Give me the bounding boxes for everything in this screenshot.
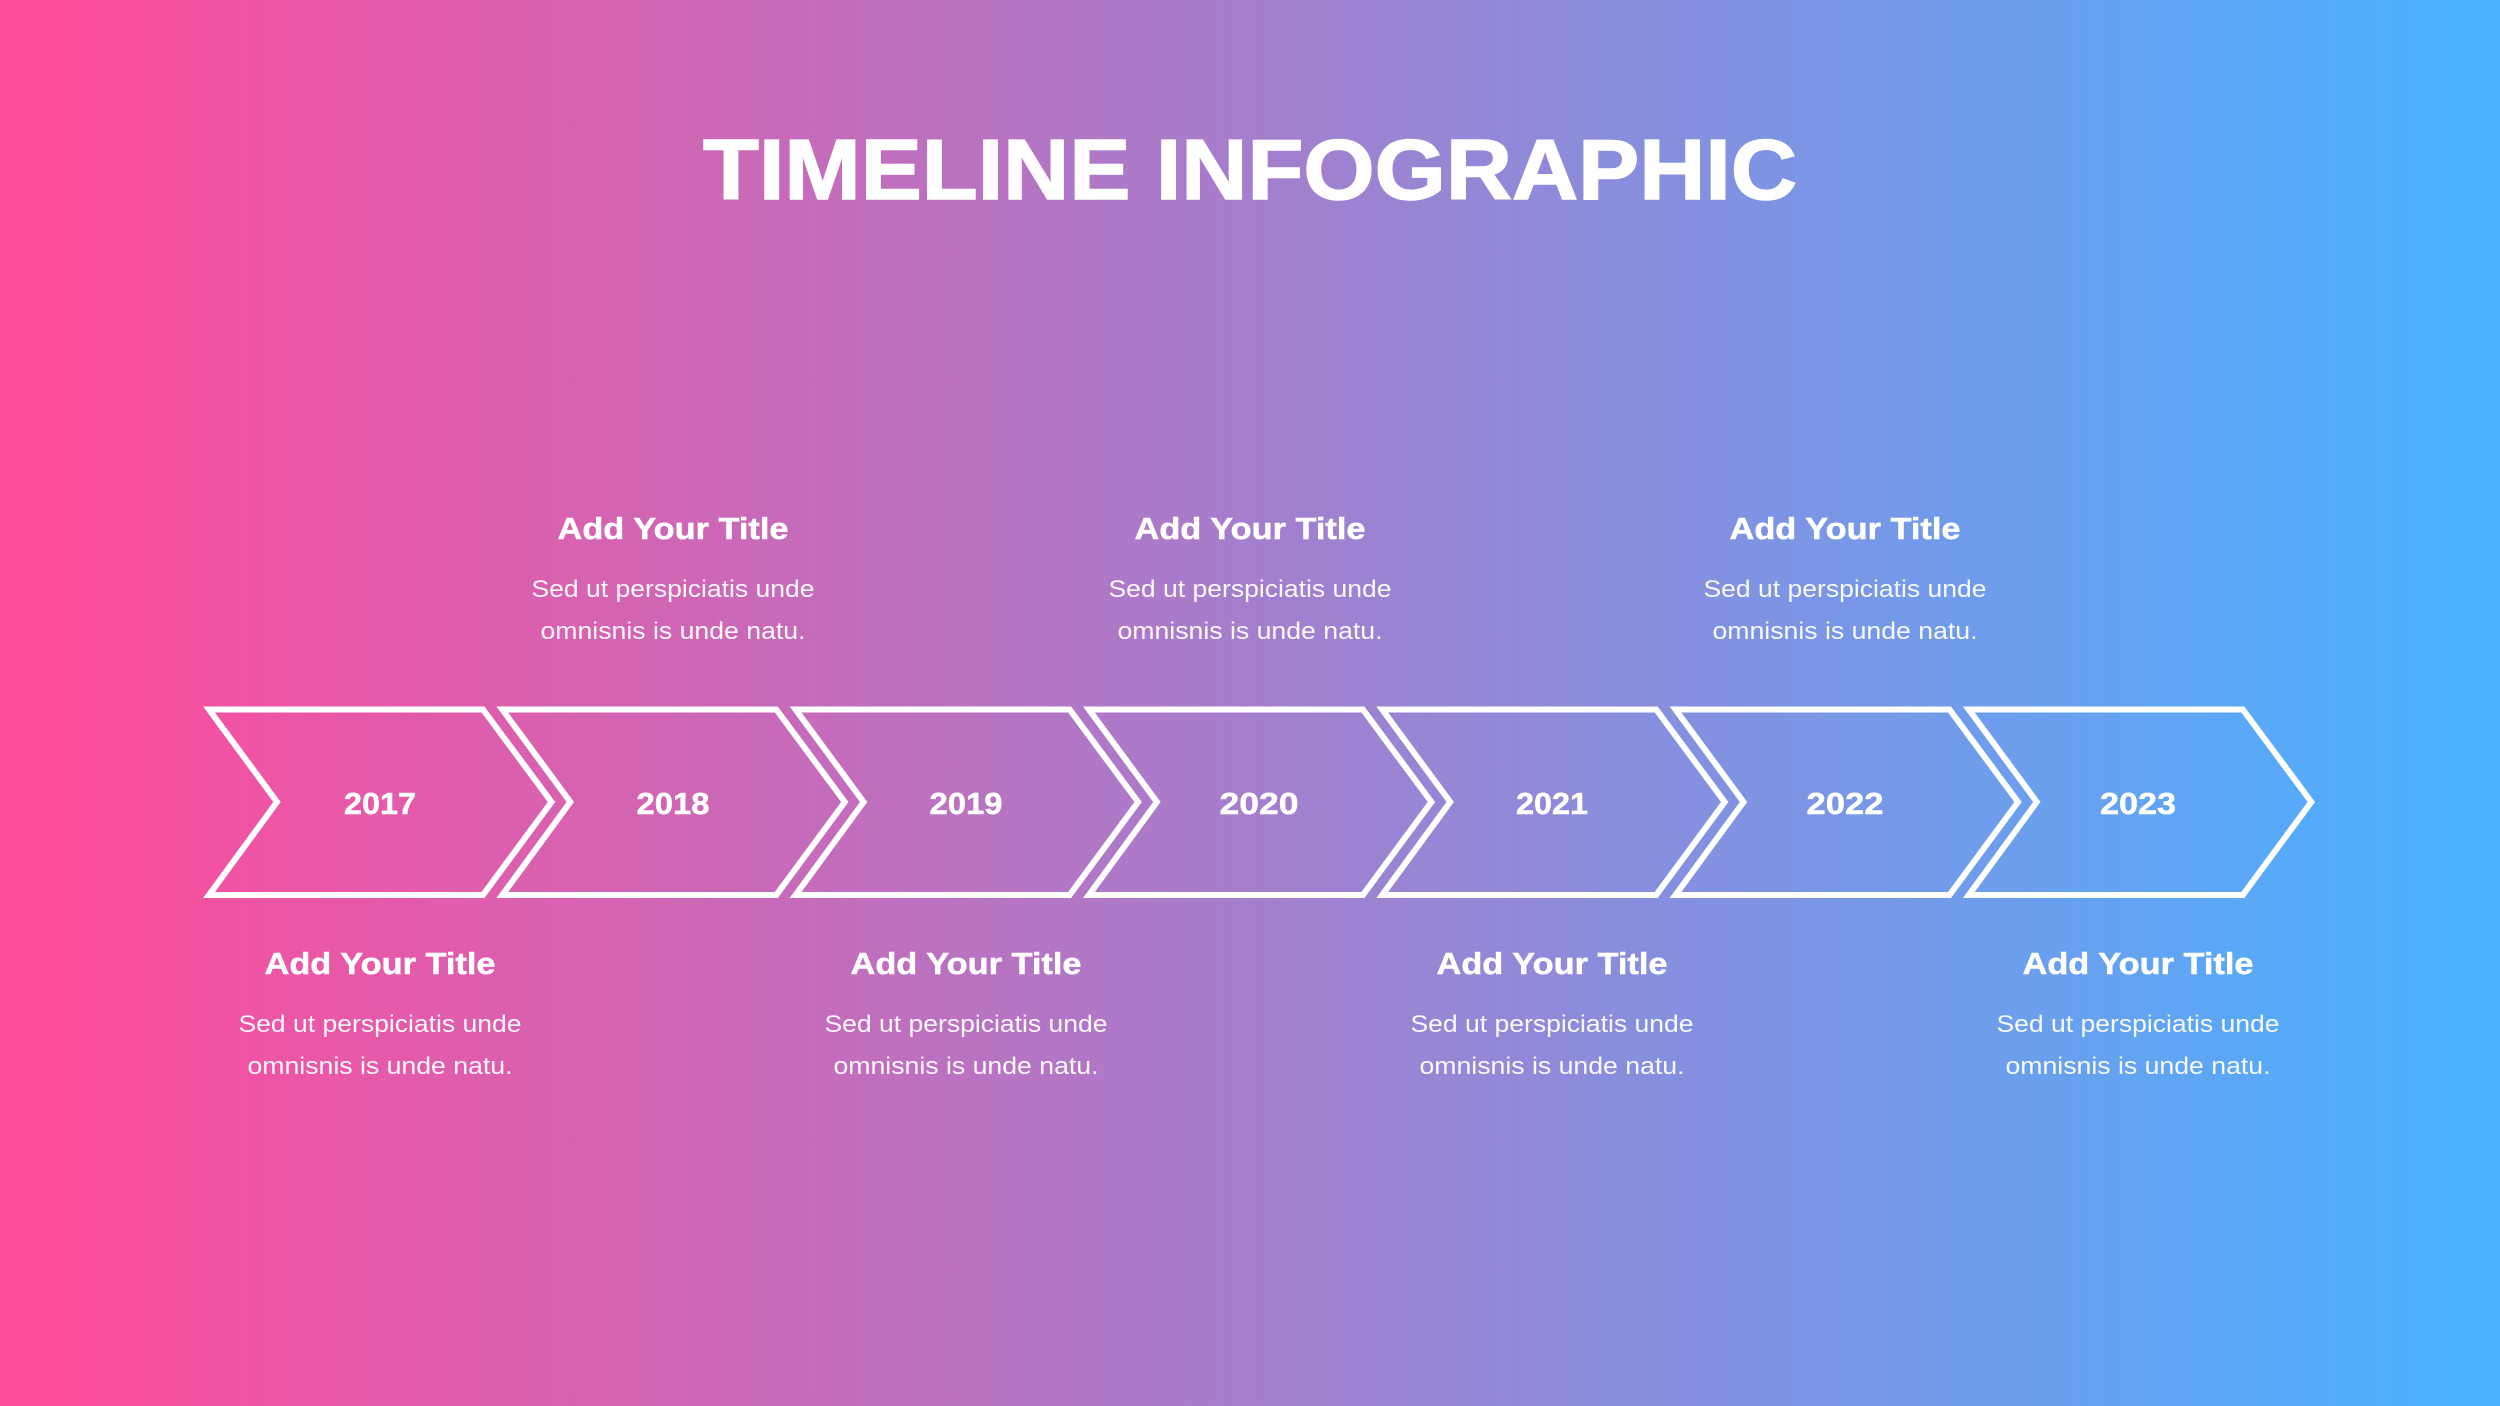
- label: 2020: omnisnis is unde natu.: [1118, 618, 1382, 645]
- label: 2022: [1704, 511, 1986, 645]
- chevron: 2020: [1089, 710, 1431, 895]
- label: 2023: omnisnis is unde natu.: [2006, 1053, 2270, 1080]
- label: 2019: [824, 946, 1108, 1080]
- chevron: 2019: 2019: [930, 786, 1002, 821]
- label: 2020: [1108, 511, 1392, 645]
- label: 2021: Add Your Title: [1436, 946, 1668, 981]
- label: 2021: [1410, 946, 1694, 1080]
- label: 2022: Sed ut perspiciatis unde: [1704, 576, 1986, 603]
- label: 2019: Sed ut perspiciatis unde: [824, 1011, 1108, 1038]
- label: 2018: Add Your Title: [558, 511, 788, 546]
- label: 2017: omnisnis is unde natu.: [248, 1053, 512, 1080]
- chevron: 2022: 2022: [1806, 786, 1884, 821]
- chevron: 2017: 2017: [344, 786, 416, 821]
- label: 2020: Add Your Title: [1134, 511, 1366, 546]
- title: TIMELINE INFOGRAPHIC: [703, 123, 1797, 218]
- label: 2019: omnisnis is unde natu.: [834, 1053, 1098, 1080]
- chevron: 2017: [209, 710, 552, 895]
- chevron: 2022: [1676, 710, 2018, 895]
- label: 2017: Add Your Title: [264, 946, 496, 981]
- label: 2021: omnisnis is unde natu.: [1420, 1053, 1684, 1080]
- label: 2018: omnisnis is unde natu.: [540, 618, 806, 645]
- label: 2018: Sed ut perspiciatis unde: [532, 576, 814, 603]
- chevron: 2021: [1382, 710, 1725, 895]
- label: 2022: omnisnis is unde natu.: [1712, 618, 1978, 645]
- chevron: 2018: [502, 710, 845, 895]
- label: 2022: Add Your Title: [1730, 511, 1960, 546]
- label: 2023: Sed ut perspiciatis unde: [1996, 1011, 2280, 1038]
- label: 2017: Sed ut perspiciatis unde: [238, 1011, 522, 1038]
- label: 2021: Sed ut perspiciatis unde: [1410, 1011, 1694, 1038]
- chevron: 2020: 2020: [1220, 786, 1298, 821]
- chevron: 2021: 2021: [1516, 786, 1588, 821]
- label: 2018: [532, 511, 814, 645]
- label: 2020: Sed ut perspiciatis unde: [1108, 576, 1392, 603]
- label: 2023: Add Your Title: [2022, 946, 2254, 981]
- label: 2023: [1996, 946, 2280, 1080]
- label: 2019: Add Your Title: [850, 946, 1082, 981]
- chevron: 2019: [796, 710, 1138, 895]
- chevron: 2023: [1969, 710, 2311, 895]
- label: 2017: [238, 946, 522, 1080]
- chevron: 2023: 2023: [2100, 786, 2176, 821]
- chevron: 2018: 2018: [636, 786, 710, 821]
